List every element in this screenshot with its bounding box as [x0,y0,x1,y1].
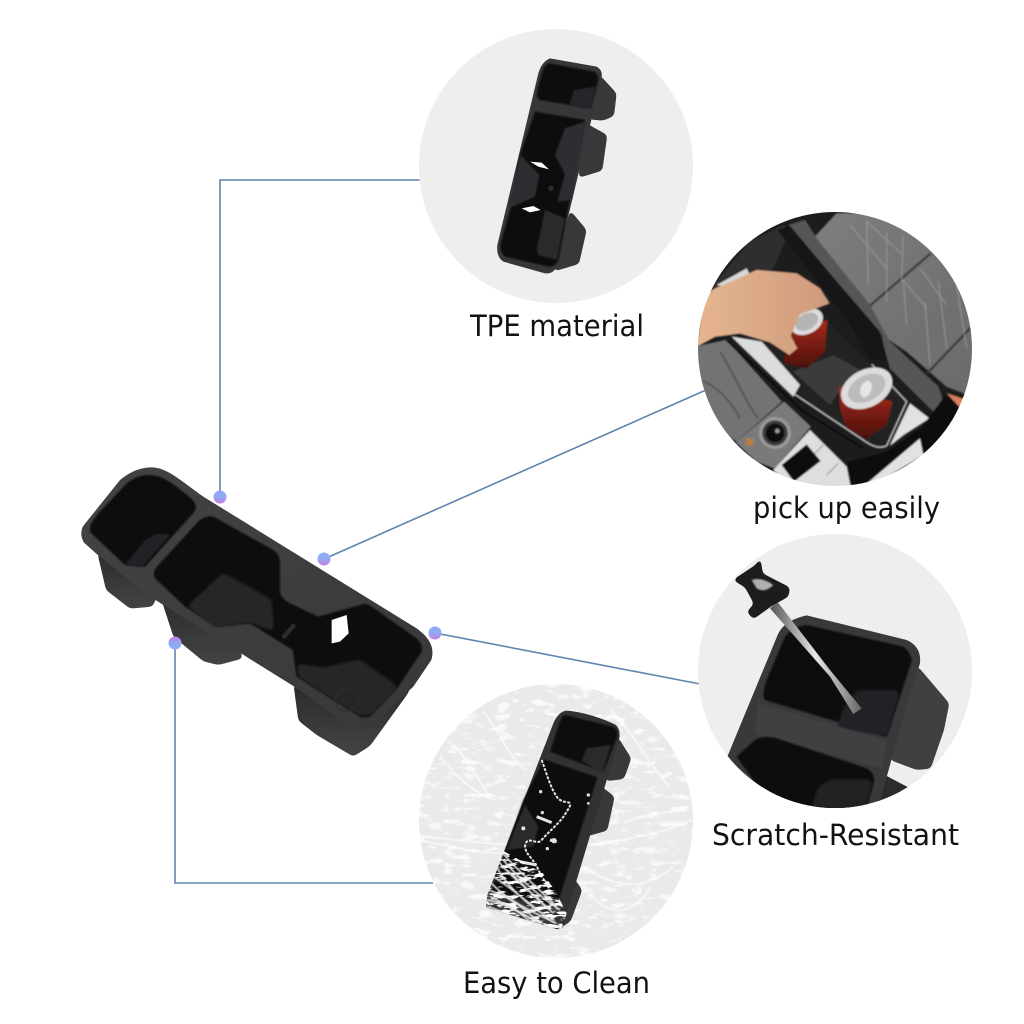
background water splash [417,680,697,960]
centre peg [284,626,293,637]
compartment 3 floor [297,659,398,716]
mid floor [555,122,585,202]
mid wall [508,155,539,208]
drive knob [759,417,791,449]
shaft [770,602,862,714]
orange tag [947,393,964,408]
circle background [698,534,972,808]
circle background [419,29,693,303]
rim [497,58,602,273]
photo base [698,212,965,486]
side cups [555,735,631,932]
label: Scratch-Resistant: Scratch-Resistant [712,818,959,852]
white trim [732,337,800,397]
lower floor [537,210,565,260]
side ear [890,665,949,770]
handle [733,557,790,619]
amber icon [746,438,753,446]
lower well [490,759,597,907]
seat panel seams [870,253,971,373]
tray [771,328,888,441]
white gloss reflections [865,403,929,485]
label: TPE material: TPE material [469,309,644,343]
stitching [850,222,967,365]
side cups [553,73,617,272]
main product: cup holder insert [81,467,432,757]
screen slot [782,444,821,482]
right dark seat base [923,394,958,432]
connector: easy to clean [175,643,433,883]
panel: easy to clean [417,680,697,960]
panel: TPE material [419,29,693,303]
panel: pick up easily photo [698,212,972,486]
lower well [737,737,874,813]
upper left interior [710,225,790,288]
upper well [537,63,598,108]
holder rim [727,615,920,813]
upper floor [582,745,611,773]
holder body [486,711,620,931]
seat leather [815,213,977,398]
connector: TPE material [220,180,420,497]
label: Easy to Clean: Easy to Clean [463,966,650,1000]
compartment 2 floor [187,573,274,632]
divider ridge [836,726,863,735]
lower well [500,112,585,267]
door armrest strip [788,220,943,412]
upper well [550,715,618,772]
control panel [736,402,811,468]
product view: top-down [497,58,617,273]
button panel [773,430,852,492]
lower floor [812,779,872,808]
slots [522,162,549,212]
tray silver edge [793,364,907,447]
upper floor [837,690,900,736]
holder top rim [81,467,432,725]
connector: pick up easily [324,390,706,559]
hand [697,270,829,355]
can back [783,303,828,368]
connector: scratch-resistant [435,633,700,684]
lower tab [876,776,908,802]
marker dots [168,490,442,650]
splash over holder [483,760,590,933]
upper well [764,625,912,737]
floor logo [335,689,358,711]
black gloss console [848,426,933,485]
compartment 1 floor [125,533,170,567]
label: pick up easily: pick up easily [753,491,940,525]
holder cups underside [97,550,414,757]
screwdriver [733,557,862,714]
inner wall [507,805,538,850]
peg [548,186,554,191]
can front [838,366,894,439]
panel: scratch-resistant [698,534,972,817]
upper floor [569,87,595,109]
circle background [419,684,693,958]
left fabric boot [695,340,782,442]
compartment 1 [90,475,196,567]
compartment 2 and 3 [154,516,422,717]
slot opening [332,615,349,643]
